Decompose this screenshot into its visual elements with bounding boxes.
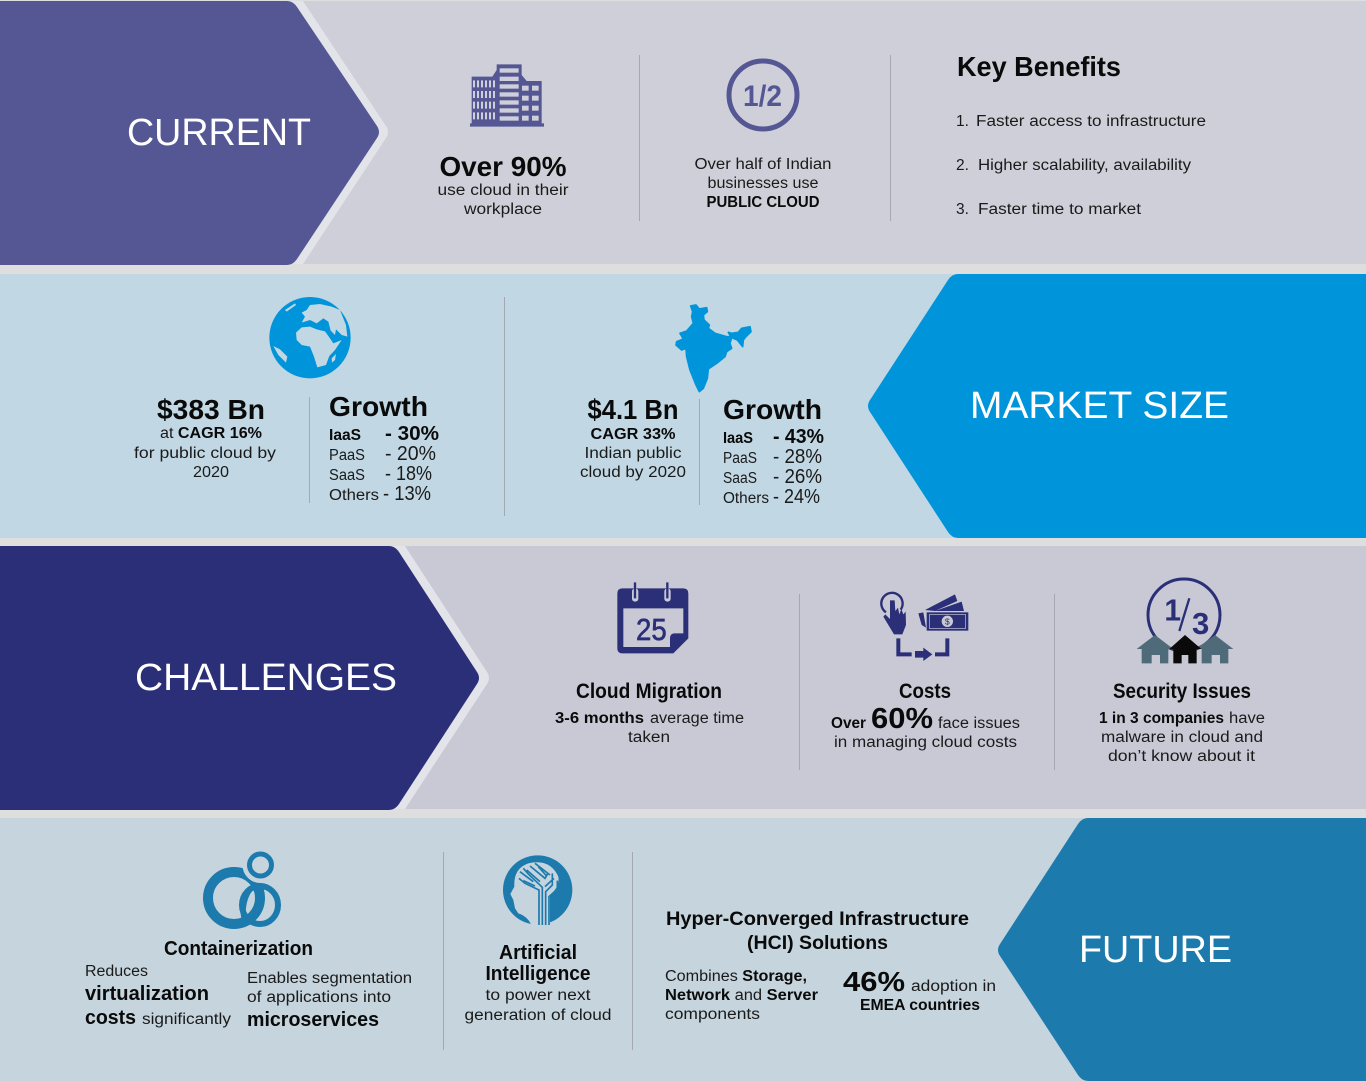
growth: india: Growth [723, 394, 822, 425]
text: containerization: Reduces [85, 963, 148, 980]
stat: public cloud: businesses use [708, 175, 818, 192]
text: migration time: 3-6 months [555, 710, 644, 727]
icon: costs [881, 593, 968, 661]
text: containerization: of applications into [247, 989, 391, 1006]
stat: cloud migration: taken [628, 729, 670, 746]
key benefits: 1. [956, 113, 969, 130]
stat: over 90% [438, 151, 568, 218]
text: hci solutions: adoption in [911, 978, 996, 995]
text: hci solutions: (HCI) Solutions [747, 933, 888, 954]
text: containerization: microservices [247, 1009, 379, 1031]
stat: cloud migration [576, 680, 722, 746]
icon: calendar: 25 [636, 613, 667, 647]
stat: security issues: have [1229, 710, 1265, 727]
text: migration time: average time [650, 710, 744, 727]
key benefits: Faster time to market [978, 201, 1142, 218]
growth: global: - 13% [383, 483, 431, 505]
icon: one third houses [1137, 579, 1233, 663]
text: containerization: Enables segmentation [247, 970, 412, 987]
growth: global: - 30% [385, 423, 439, 445]
stat: costs [831, 680, 1020, 751]
stat: india market: Indian public [584, 445, 682, 462]
heading: current: CURRENT [127, 112, 311, 154]
text: artificial intelligence: Intelligence [486, 963, 590, 985]
stat: security issues: malware in cloud and [1101, 729, 1263, 746]
stat: security issues: 1 in 3 companies [1099, 710, 1224, 727]
growth: global: PaaS [329, 447, 365, 464]
arrow: future [998, 818, 1366, 1081]
stat: security issues: Security Issues [1113, 680, 1251, 703]
text: containerization: costs [85, 1007, 136, 1029]
growth: global: SaaS [329, 467, 365, 484]
text: hci solutions: Network and Server [665, 987, 818, 1004]
key benefits: Higher scalability, availability [978, 157, 1191, 174]
icon: ai head [503, 855, 572, 926]
stat: india market: $4.1 Bn [588, 394, 678, 425]
heading: market size: MARKET SIZE [970, 385, 1229, 427]
stat: global market: 2020 [193, 464, 229, 481]
text: containerization [85, 938, 412, 1031]
panel: market size [0, 274, 1366, 538]
stat: global market: at CAGR 16% [160, 425, 262, 442]
stat: india market: cloud by 2020 [580, 464, 686, 481]
icon: globe [269, 297, 351, 378]
stat: global market: for public cloud by [134, 445, 276, 462]
icon: calendar [617, 582, 688, 653]
stat: costs: face issues [938, 715, 1020, 732]
icon: one third houses: 3 [1192, 607, 1209, 641]
growth: global: Growth [329, 391, 428, 422]
text: hci solutions: 46% [843, 966, 905, 997]
key benefits: Key Benefits [957, 51, 1121, 82]
growth: india: PaaS [723, 450, 757, 467]
stat: public cloud [694, 156, 832, 211]
panel: challenges [0, 546, 1366, 810]
stat: over 90%: Over 90% [440, 151, 567, 182]
icon: one third houses: 1 [1164, 594, 1181, 628]
growth: global [329, 391, 439, 505]
growth: global: - 18% [385, 463, 432, 485]
stat: india market [580, 394, 686, 481]
text: hci solutions [665, 909, 996, 1023]
panel: future [0, 818, 1366, 1081]
key benefits: Faster access to infrastructure [976, 113, 1206, 130]
stat: public cloud: Over half of Indian [694, 156, 832, 173]
stat: costs: in managing cloud costs [834, 734, 1017, 751]
text: artificial intelligence: to power next [486, 987, 591, 1004]
growth: india: - 26% [773, 466, 822, 488]
stat: india market: CAGR 33% [590, 426, 676, 443]
panel: current [0, 1, 1366, 265]
text: hci solutions: Combines Storage, [665, 968, 807, 985]
text: hci solutions: EMEA countries [860, 997, 980, 1014]
text: artificial intelligence [464, 942, 612, 1024]
arrow: challenges [0, 546, 479, 810]
stat: security issues [1099, 680, 1265, 765]
icon: india map [676, 305, 751, 392]
stat: global market: $383 Bn [157, 394, 265, 425]
key benefits: 3. [956, 201, 969, 218]
text: migration time [555, 710, 744, 727]
growth: global: Others [329, 487, 379, 504]
text: artificial intelligence: Artificial [499, 942, 577, 964]
heading: challenges: CHALLENGES [135, 657, 397, 699]
stat: costs: 60% [871, 703, 933, 735]
growth: india: IaaS [723, 430, 753, 447]
icon: one half circle: 1/2 [743, 80, 782, 113]
stat: costs: Over [831, 715, 866, 732]
stat: security issues: don’t know about it [1108, 748, 1256, 765]
icon: costs: $ [945, 616, 950, 626]
heading: future: FUTURE [1079, 929, 1232, 971]
text: containerization: significantly [142, 1011, 231, 1028]
growth: india: - 43% [773, 426, 824, 448]
text: containerization: Containerization [164, 938, 313, 960]
growth: india [723, 394, 824, 508]
text: containerization: virtualization [85, 983, 209, 1005]
stat: costs: Costs [899, 680, 951, 703]
stat: over 90%: use cloud in their [438, 182, 568, 199]
stat: cloud migration: Cloud Migration [576, 680, 722, 703]
growth: global: IaaS [329, 427, 361, 444]
growth: india: SaaS [723, 470, 757, 487]
growth: india: Others [723, 490, 769, 507]
stat: over 90%: workplace [463, 201, 542, 218]
text: hci solutions: Hyper-Converged Infrastructure [666, 909, 969, 930]
icon: containers [208, 850, 278, 924]
growth: global: - 20% [385, 443, 436, 465]
text: artificial intelligence: generation of cloud [464, 1007, 612, 1024]
arrow: market size [868, 274, 1366, 538]
icon: office buildings [470, 64, 544, 127]
text: hci solutions: components [665, 1006, 760, 1023]
key benefits: 2. [956, 157, 969, 174]
arrow: current [0, 1, 379, 265]
stat: global market [134, 394, 276, 481]
key benefits [956, 51, 1206, 218]
icon: one half circle [729, 61, 797, 129]
growth: india: - 24% [773, 486, 820, 508]
stat: public cloud: PUBLIC CLOUD [706, 194, 820, 211]
growth: india: - 28% [773, 446, 822, 468]
